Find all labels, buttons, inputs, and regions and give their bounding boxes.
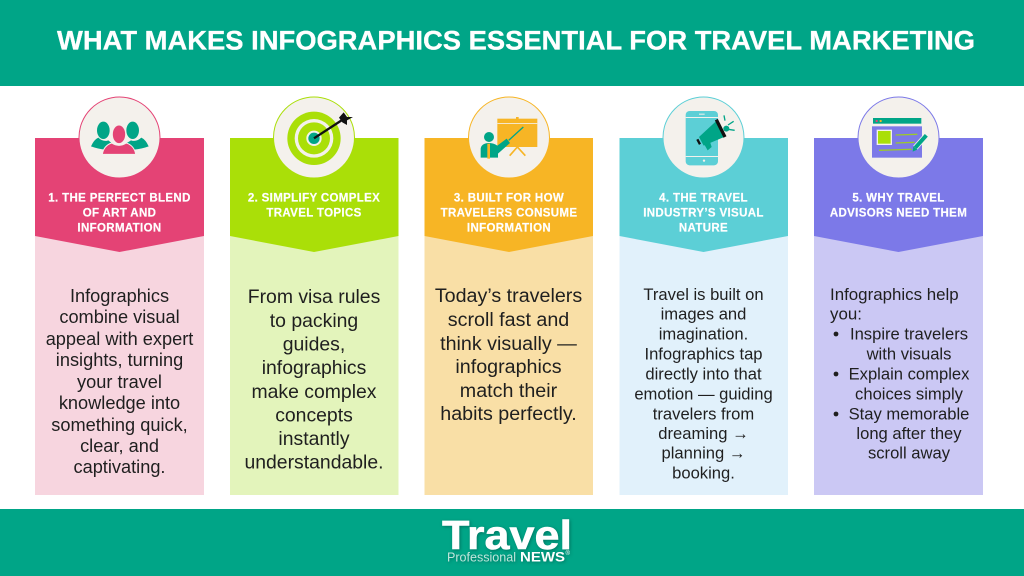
panel: 1 perfect blend <box>35 97 204 495</box>
body text: understandable. <box>244 452 384 474</box>
body text: knowledge into <box>59 393 180 413</box>
body text: appeal with expert <box>46 329 193 349</box>
heading: NATURE <box>679 222 728 234</box>
body text: make complex <box>251 381 377 403</box>
body text: dreaming → <box>658 424 749 443</box>
icon: phone megaphone <box>663 97 744 178</box>
body text: scroll fast and <box>448 309 569 331</box>
heading: INFORMATION <box>467 222 551 234</box>
footer band <box>0 509 1024 576</box>
icon: web page <box>858 97 939 178</box>
body text: choices simply <box>855 384 964 404</box>
body text: long after they <box>856 424 962 443</box>
body text <box>830 285 970 462</box>
body text: combine visual <box>59 307 180 327</box>
logo: NEWS <box>520 548 565 564</box>
body text: your travel <box>77 372 162 392</box>
heading: TRAVELERS CONSUME <box>441 208 577 220</box>
body text: insights, turning <box>56 350 183 370</box>
body text: with visuals <box>866 344 951 364</box>
body text: scroll away <box>868 444 951 462</box>
icon: presenter <box>468 97 550 178</box>
body text: Today’s travelers <box>435 285 582 307</box>
heading: INFORMATION <box>77 222 162 234</box>
body text: think visually — <box>440 333 577 355</box>
body text: Infographics help <box>830 285 959 304</box>
body text: From visa rules <box>248 286 380 308</box>
body text: concepts <box>275 404 353 426</box>
body text: Explain complex <box>849 364 970 384</box>
body text: Infographics tap <box>644 344 763 364</box>
body text: captivating. <box>73 457 166 477</box>
logo: Professional <box>447 550 516 564</box>
body text: you: <box>830 304 862 324</box>
body text: Inspire travelers <box>850 324 968 344</box>
body text: Stay memorable <box>849 404 969 424</box>
title: WHAT MAKES INFOGRAPHICS ESSENTIAL FOR TRAVEL MARKETING <box>57 26 975 56</box>
body text: imagination. <box>659 324 748 344</box>
body text: infographics <box>455 356 562 378</box>
icon: target <box>274 97 354 178</box>
body text: to packing <box>270 310 358 332</box>
heading: OF ART AND <box>83 208 156 220</box>
panel: 3 built for travelers <box>424 97 593 495</box>
logo: ® <box>566 550 570 557</box>
body text: planning → <box>662 444 745 462</box>
heading: 4. THE TRAVEL <box>659 192 748 204</box>
body text: booking. <box>672 464 735 482</box>
heading: 2. SIMPLIFY COMPLEX <box>248 192 380 204</box>
heading: INDUSTRY’S VISUAL <box>643 208 764 220</box>
panel: 2 simplify <box>230 97 398 495</box>
body text: emotion — guiding <box>634 384 773 404</box>
panel: 4 visual nature <box>620 97 788 495</box>
body text: images and <box>661 304 746 324</box>
body text: instantly <box>278 428 350 450</box>
body text: infographics <box>262 357 366 379</box>
body text: habits perfectly. <box>440 403 577 425</box>
body text: travelers from <box>653 404 754 424</box>
body text: match their <box>460 380 558 402</box>
body text: Travel is built on <box>643 285 764 304</box>
heading: ADVISORS NEED THEM <box>830 208 967 220</box>
heading: 1. THE PERFECT BLEND <box>48 192 191 204</box>
body text: clear, and <box>80 436 159 456</box>
heading: 5. WHY TRAVEL <box>852 192 945 204</box>
logo: Travel <box>442 512 572 558</box>
header band <box>0 0 1024 86</box>
panel: 5 why advisors <box>814 97 983 495</box>
body text: directly into that <box>645 364 762 384</box>
heading: TRAVEL TOPICS <box>266 208 362 220</box>
body text: guides, <box>283 334 345 356</box>
body text: something quick, <box>51 415 188 435</box>
heading: 3. BUILT FOR HOW <box>454 192 564 204</box>
icon: people <box>79 97 160 178</box>
body text: Infographics <box>70 286 169 306</box>
